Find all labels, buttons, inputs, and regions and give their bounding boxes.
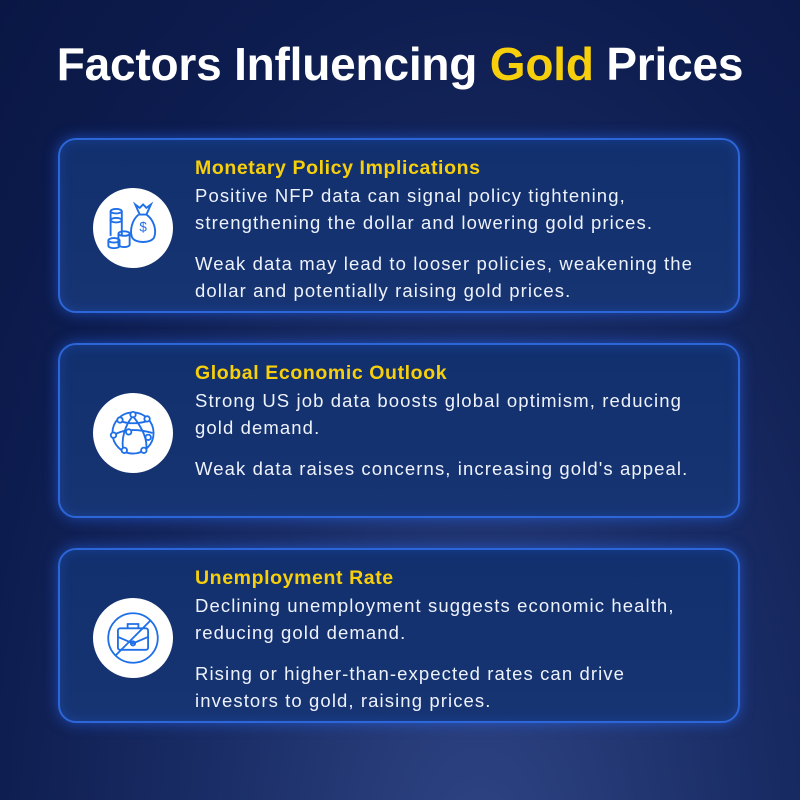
text: global outlook: Weak data raises concerns, increasing gold's appeal.: [195, 458, 688, 479]
text: global outlook: Strong US job data boosts global optimism, reducing gold demand.: [195, 390, 682, 438]
text: monetary policy: Monetary Policy Implications: [195, 157, 481, 179]
text: monetary policy: Weak data may lead to looser policies, weakening the dollar and potentially raising gold prices.: [195, 253, 693, 301]
text: monetary policy: Positive NFP data can signal policy tightening, strengthening the dollar and lowering gold prices.: [195, 185, 653, 233]
text: unemployment: Unemployment Rate: [195, 567, 394, 589]
text: global outlook: [195, 362, 688, 479]
panel: global outlook: [58, 343, 740, 518]
text: monetary policy: [195, 157, 693, 301]
text: global outlook: Global Economic Outlook: [195, 362, 447, 384]
title: Factors Influencing Gold Prices: [57, 38, 743, 90]
panel: unemployment: [58, 548, 740, 723]
icon: globe network: [93, 393, 173, 473]
text: unemployment: Rising or higher-than-expected rates can drive investors to gold, raising prices.: [195, 663, 625, 711]
icon: crossed briefcase: [93, 598, 173, 678]
text: unemployment: Declining unemployment suggests economic health, reducing gold demand.: [195, 595, 675, 643]
text: unemployment: [195, 567, 675, 711]
icon: money bag and coins: $: [139, 219, 147, 234]
icon: money bag and coins: [93, 188, 173, 268]
panel: monetary policy: [58, 138, 740, 313]
